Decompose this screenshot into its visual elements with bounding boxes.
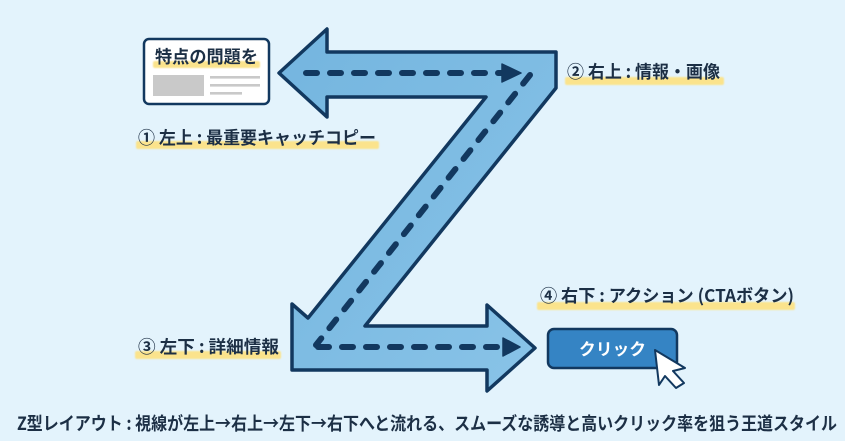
dashed path: bottom xyxy=(318,338,520,356)
card headline: 特点の問題を xyxy=(155,44,258,69)
card highlight xyxy=(153,61,260,68)
label 3: ③ 左下 : 詳細情報 xyxy=(138,334,279,359)
icon: mouse cursor xyxy=(655,350,685,388)
label 1: ① 左上 : 最重要キャッチコピー xyxy=(138,125,376,150)
card text lines xyxy=(210,76,260,95)
label 2: ② 右上 : 情報・画像 xyxy=(567,59,720,84)
Z-shaped arrow xyxy=(279,29,556,391)
card image placeholder xyxy=(153,75,204,96)
label 4: ④ 右下 : アクション (CTAボタン) xyxy=(540,283,794,308)
dashed path: top xyxy=(306,64,521,82)
dashed path: diagonal xyxy=(316,75,530,345)
CTA button xyxy=(548,329,685,388)
headline card mockup xyxy=(144,39,269,104)
CTA button: クリック xyxy=(579,336,646,360)
